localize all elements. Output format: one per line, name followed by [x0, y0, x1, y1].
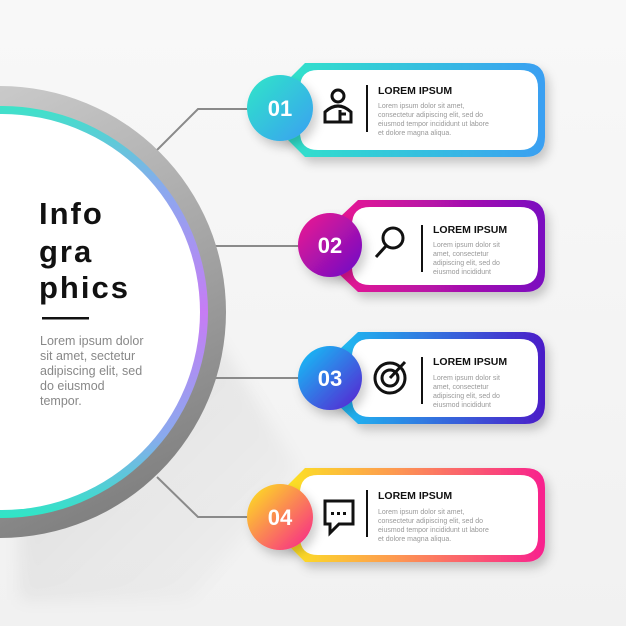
- step 2: Lorem ipsum dolor sit: [433, 242, 500, 249]
- intro text: sit amet, sectetur: [40, 349, 135, 363]
- step 4: Lorem ipsum dolor sit amet,: [378, 509, 464, 516]
- title: Info: [39, 196, 104, 231]
- step 1: 01: [268, 96, 292, 121]
- step 3: 03: [318, 366, 342, 391]
- intro text: tempor.: [40, 394, 82, 408]
- step 2: eiusmod incididunt: [433, 269, 491, 276]
- step 1: eiusmod tempor incididunt ut labore: [378, 121, 489, 128]
- big circle: [0, 86, 226, 538]
- step 3: amet, consectetur: [433, 384, 489, 391]
- step 3: [298, 332, 545, 424]
- step 2: amet, consectetur: [433, 251, 489, 258]
- icon: chat: [325, 501, 353, 533]
- step 2: adipiscing elit, sed do: [433, 260, 500, 267]
- title: gra: [39, 234, 93, 269]
- connector lines: [157, 109, 300, 517]
- icon: magnifier: [376, 228, 403, 257]
- step 4: et dolore magna aliqua.: [378, 536, 451, 543]
- intro text: adipiscing elit, sed: [40, 364, 142, 378]
- step 1: consectetur adipiscing elit, sed do: [378, 112, 483, 119]
- step 1: [247, 63, 545, 157]
- step 4: consectetur adipiscing elit, sed do: [378, 518, 483, 525]
- icon: target: [375, 362, 405, 393]
- title: [39, 196, 130, 305]
- step 3: adipiscing elit, sed do: [433, 393, 500, 400]
- step 4: LOREM IPSUM: [378, 490, 452, 502]
- intro text: Lorem ipsum dolor: [40, 334, 144, 348]
- big circle shadow: [20, 330, 300, 600]
- step 1: LOREM IPSUM: [378, 85, 452, 97]
- step 4: 04: [268, 505, 293, 530]
- step 2: [298, 200, 545, 292]
- intro text: do eiusmod: [40, 379, 105, 393]
- step 3: LOREM IPSUM: [433, 356, 507, 368]
- icon: person: [325, 90, 351, 122]
- step 1: Lorem ipsum dolor sit amet,: [378, 103, 464, 110]
- title: phics: [39, 270, 130, 305]
- step 4: [247, 468, 545, 562]
- step 3: Lorem ipsum dolor sit: [433, 375, 500, 382]
- step 1: et dolore magna aliqua.: [378, 130, 451, 137]
- title underline: [42, 317, 89, 320]
- step 2: 02: [318, 233, 342, 258]
- intro text: [40, 334, 144, 408]
- step 3: eiusmod incididunt: [433, 402, 491, 409]
- step 2: LOREM IPSUM: [433, 224, 507, 236]
- step 4: eiusmod tempor incididunt ut labore: [378, 527, 489, 534]
